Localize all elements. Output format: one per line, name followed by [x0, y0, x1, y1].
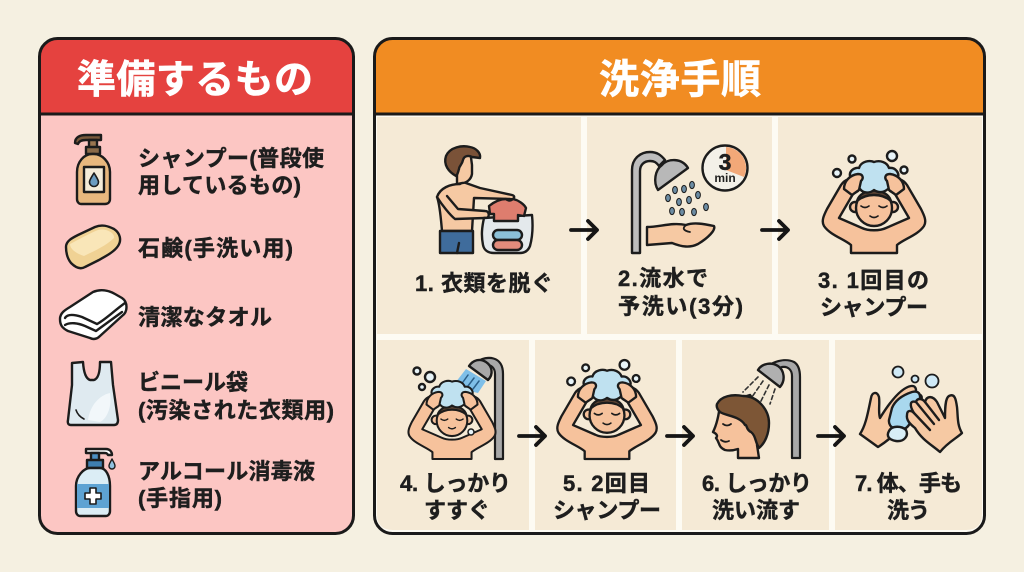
step cell 2 — [587, 117, 772, 334]
panel: items to prepare — [40, 38, 354, 534]
icon: rinsing head profile — [713, 360, 800, 458]
panel outline — [40, 38, 354, 534]
step cell 3 — [778, 117, 982, 334]
icon: shower with timer: 3 — [719, 149, 731, 175]
label: step 3 line 2: シャンプー — [820, 295, 928, 320]
icon: shower with timer — [632, 146, 748, 253]
icon: shower with timer: min — [714, 171, 736, 185]
step cell 4 — [377, 340, 529, 530]
icon: second shampoo — [557, 360, 657, 459]
label: step 6: 6. しっかり — [702, 471, 812, 496]
panel body — [374, 38, 984, 534]
label: step 4 line 2: すすぐ — [424, 498, 490, 523]
icon: soap — [66, 226, 120, 268]
arrow: step 4 to 5 — [519, 427, 545, 445]
label: step 7 line 2: 洗う — [887, 498, 930, 523]
label: step 2: 2.流水で — [618, 266, 708, 291]
label: plastic bag line 2: (汚染された衣類用) — [138, 398, 334, 423]
label: shampoo: シャンプー(普段使 — [138, 146, 324, 171]
icon: shampooing head — [823, 151, 925, 253]
arrow: step 2 to 3 — [762, 221, 788, 239]
heading: 洗浄手順: 洗浄手順 — [599, 58, 761, 102]
arrow: step 1 to 2 — [571, 221, 597, 239]
heading: 準備するもの: 準備するもの — [77, 59, 313, 102]
icon: washing hands — [860, 366, 962, 452]
label: step 7: 7. 体、手も — [855, 471, 962, 496]
label: sanitizer: アルコール消毒液 — [138, 459, 315, 484]
step cell 7 — [835, 340, 982, 530]
icon: plastic bag — [68, 362, 118, 425]
label: towel: 清潔なタオル — [138, 305, 272, 330]
label: sanitizer line 2: (手指用) — [138, 486, 222, 511]
icon: shampoo bottle — [75, 135, 110, 204]
step cell 6 — [682, 340, 829, 530]
label: shampoo line 2: 用しているもの) — [138, 173, 301, 198]
icon: towel — [60, 290, 126, 339]
label: step 4: 4. しっかり — [400, 471, 511, 496]
label: step 2 line 2: 予洗い(3分) — [618, 294, 743, 319]
arrow: step 6 to 7 — [818, 427, 844, 445]
label: step 3: 3. 1回目の — [818, 268, 929, 293]
icon: man undressing — [437, 146, 533, 253]
label: step 6 line 2: 洗い流す — [712, 498, 800, 523]
panel: washing procedure — [374, 38, 984, 534]
icon: hand sanitizer — [76, 449, 115, 516]
arrow: step 5 to 6 — [667, 427, 693, 445]
label: step 1: 1. 衣類を脱ぐ — [415, 271, 553, 296]
panel outline — [374, 38, 984, 534]
panel body — [40, 38, 354, 534]
label: soap: 石鹸(手洗い用) — [138, 236, 293, 261]
icon: rinsing shampoo — [408, 358, 503, 459]
step cell 5 — [535, 340, 676, 530]
label: plastic bag: ビニール袋 — [138, 370, 248, 395]
panel header — [40, 38, 354, 113]
header rule — [40, 112, 354, 116]
step cell 1 — [377, 117, 581, 334]
header rule — [374, 112, 984, 116]
panel header — [374, 38, 984, 113]
label: step 5: 5. 2回目 — [563, 471, 650, 496]
label: step 5 line 2: シャンプー — [553, 498, 661, 523]
